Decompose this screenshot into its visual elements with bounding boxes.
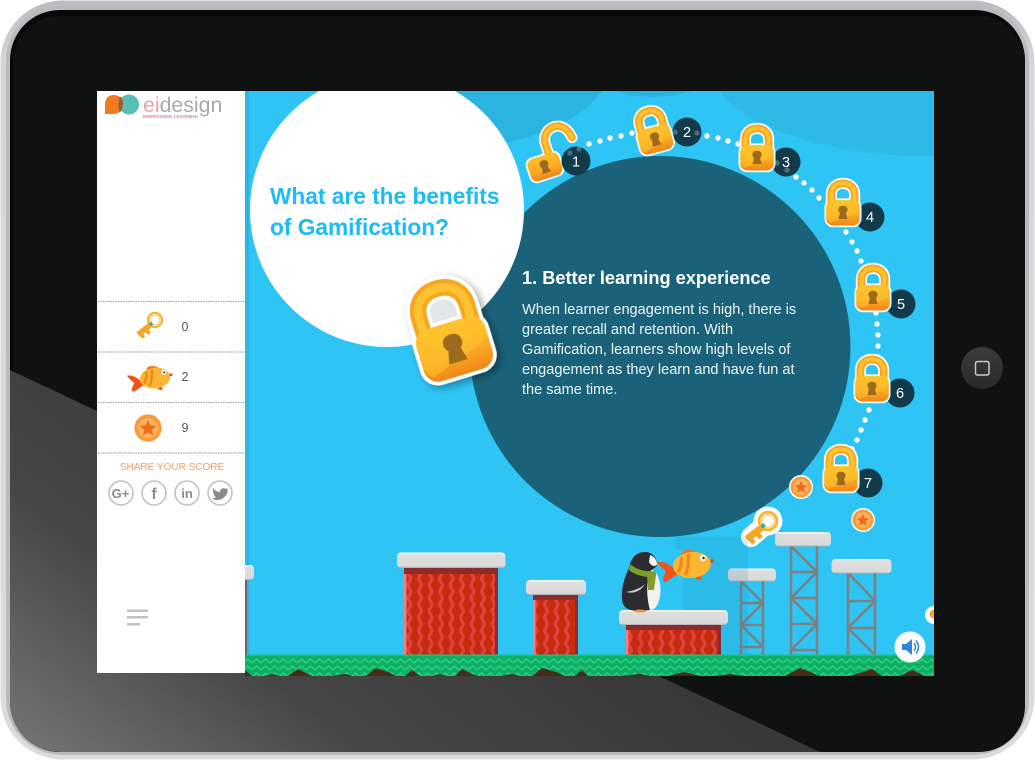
fish score <box>127 366 189 392</box>
menu icon <box>127 610 148 626</box>
step 6 lock: 6 <box>896 386 904 402</box>
coin score: 9 <box>182 421 189 435</box>
partial fish at right edge <box>925 606 934 624</box>
step 7 lock <box>823 449 882 498</box>
content body text: When learner engagement is high, there is <box>522 302 796 318</box>
step 2 lock <box>630 106 702 158</box>
ground strip <box>245 654 934 676</box>
translucent block <box>675 537 748 655</box>
sky background <box>245 91 934 676</box>
content body text: greater recall and retention. With <box>522 322 733 338</box>
title: What are the benefits <box>270 183 499 209</box>
penguin character <box>622 550 714 612</box>
content body text: Gamification, learners show high levels of <box>522 342 791 358</box>
step 5 lock <box>855 268 916 318</box>
social icons <box>109 481 232 505</box>
brick pillar under penguin <box>619 610 728 655</box>
sound button <box>894 632 926 662</box>
score row dividers <box>98 302 245 453</box>
step 3 lock: 3 <box>782 155 790 171</box>
share your score label: SHARE YOUR SCORE <box>120 462 224 473</box>
fish score: 2 <box>182 370 189 384</box>
eidesign logo: eidesign <box>143 93 222 117</box>
icon: large padlock <box>398 277 501 390</box>
step 2 lock: 2 <box>683 125 691 141</box>
dark content circle <box>470 156 850 537</box>
step 1 unlocked <box>526 120 590 184</box>
step 5 lock: 5 <box>897 297 905 313</box>
content body text: the same time. <box>522 382 617 398</box>
eidesign logo: ENERGISING LEARNING <box>143 114 199 119</box>
step 4 lock: 4 <box>866 210 874 226</box>
step 7 lock: 7 <box>864 476 872 492</box>
content body text: engagement as they learn and have fun at <box>522 362 795 378</box>
home button <box>961 347 1003 389</box>
brick pillars left <box>240 552 586 655</box>
social icons: G+ <box>112 486 130 501</box>
social icons: in <box>181 486 193 501</box>
eidesign logo <box>105 93 222 119</box>
step 1 unlocked: 1 <box>572 154 580 170</box>
social icons: f <box>151 486 157 503</box>
sidebar panel <box>97 91 245 673</box>
dotted progress path <box>586 130 881 452</box>
step 6 lock <box>854 359 914 408</box>
game screen <box>240 73 943 676</box>
content heading: 1. Better learning experience <box>522 268 771 288</box>
collectible coins <box>789 475 875 532</box>
coin score <box>132 412 189 444</box>
key score <box>138 314 189 338</box>
step 4 lock <box>825 183 884 232</box>
key score: 0 <box>182 320 189 334</box>
steel scaffold towers <box>728 532 892 655</box>
white title circle <box>250 73 524 347</box>
step 3 lock <box>739 128 800 176</box>
collectible key <box>747 506 782 543</box>
title: of Gamification? <box>270 214 449 240</box>
